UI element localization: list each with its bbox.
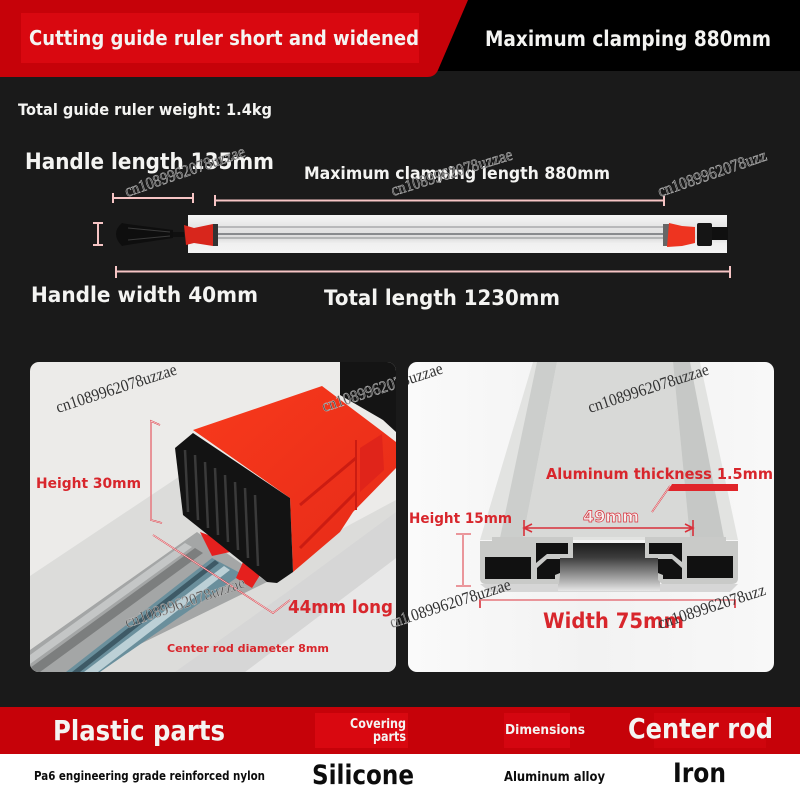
right clamp xyxy=(663,223,728,247)
rail channel xyxy=(30,532,267,672)
right inner slot upper xyxy=(649,543,682,562)
dimension: clamping length xyxy=(215,195,664,206)
left groove xyxy=(500,362,557,538)
label: 49mm: 49mm xyxy=(583,507,639,526)
label: width 75mm: Width 75mm xyxy=(543,609,684,633)
right inner slot lower xyxy=(658,559,682,579)
left block xyxy=(480,537,573,584)
rail surface xyxy=(30,476,396,672)
label: maximum clamping length: Maximum clamping length 880mm xyxy=(304,164,610,183)
centre surface xyxy=(523,362,690,537)
central opening xyxy=(558,543,660,591)
header title left: Cutting guide ruler short and widened xyxy=(29,26,419,50)
black end cap xyxy=(175,433,293,583)
lower surface xyxy=(245,558,396,672)
label: height 15mm: Height 15mm xyxy=(409,511,512,527)
dimension: width 75mm xyxy=(480,600,735,608)
watermark: panel gap: cn1 xyxy=(387,608,410,632)
table: header row xyxy=(0,707,800,754)
rail top surfaces xyxy=(480,362,738,540)
watermark: top middle: cn1089962078uzzae xyxy=(389,145,515,200)
panel: aluminium profile xyxy=(408,362,774,672)
header: center rod: Center rod xyxy=(628,712,773,745)
label: total length: Total length 1230mm xyxy=(324,286,560,310)
watermark: cn1089962078uzzae xyxy=(585,360,711,417)
dimension: height 30mm xyxy=(151,421,162,523)
label: handle length: Handle length 135mm xyxy=(25,150,274,175)
right block xyxy=(645,537,738,584)
value: iron: Iron xyxy=(673,758,726,789)
right hollow xyxy=(687,556,733,578)
aluminium rail xyxy=(188,215,727,253)
value: silicone: Silicone xyxy=(312,760,414,791)
dimension: total length xyxy=(116,266,730,278)
label: 44mm long: 44mm long xyxy=(288,597,393,618)
header: covering parts xyxy=(350,717,406,745)
watermark: cn1089962078uzz xyxy=(655,580,768,633)
label: handle width: Handle width 40mm xyxy=(31,283,258,307)
watermark: top left: cn1089962078uzzae xyxy=(122,142,247,201)
overview diagram xyxy=(93,193,730,278)
callout arrow: aluminium thickness xyxy=(652,484,738,512)
value: nylon: Pa6 engineering grade reinforced nylon xyxy=(34,768,265,783)
left handle xyxy=(116,223,218,246)
header: covering parts: parts xyxy=(373,730,406,745)
value: aluminium alloy: Aluminum alloy xyxy=(504,770,605,785)
black handle behind xyxy=(340,362,396,432)
left hollow xyxy=(485,557,531,579)
dimension: 44mm xyxy=(153,535,290,613)
header: plastic parts: Plastic parts xyxy=(53,714,225,747)
header: covering parts: Covering xyxy=(350,717,406,732)
label: height 30mm: Height 30mm xyxy=(36,476,141,492)
left inner slot lower xyxy=(537,559,560,579)
watermark: cn1089962078uzzae xyxy=(319,359,445,416)
dimension: handle length xyxy=(113,193,193,203)
header band xyxy=(0,0,800,77)
watermark: cn1089962078uzzae xyxy=(319,359,445,416)
dimension: height 15mm xyxy=(456,534,471,586)
label: aluminium thickness: Aluminum thickness 1.5mm xyxy=(546,465,773,483)
watermark: cn1089962078uzzae xyxy=(122,573,247,632)
profile front face xyxy=(480,537,738,591)
header: dimensions: Dimensions xyxy=(505,722,585,738)
label: center rod diameter: Center rod diameter 8mm xyxy=(167,642,329,655)
watermark: top right: cn1089962078uzz xyxy=(655,146,769,201)
panel: clamp close-up xyxy=(30,362,396,672)
dimension: 49mm xyxy=(524,520,693,536)
red teeth xyxy=(200,532,262,588)
clamp recess details xyxy=(300,434,384,548)
table: values row xyxy=(0,754,800,800)
watermark: cn1089962078uzzae xyxy=(387,575,513,632)
header title right: Maximum clamping 880mm xyxy=(485,27,771,51)
weight text: Total guide ruler weight: 1.4kg xyxy=(18,100,272,119)
dimension: handle width xyxy=(93,223,103,245)
right groove xyxy=(673,362,724,538)
left inner slot upper xyxy=(536,543,568,563)
rail floor shadow xyxy=(480,584,738,592)
watermark: cn1089962078uzzae xyxy=(53,360,179,417)
red clamp body xyxy=(193,386,396,572)
